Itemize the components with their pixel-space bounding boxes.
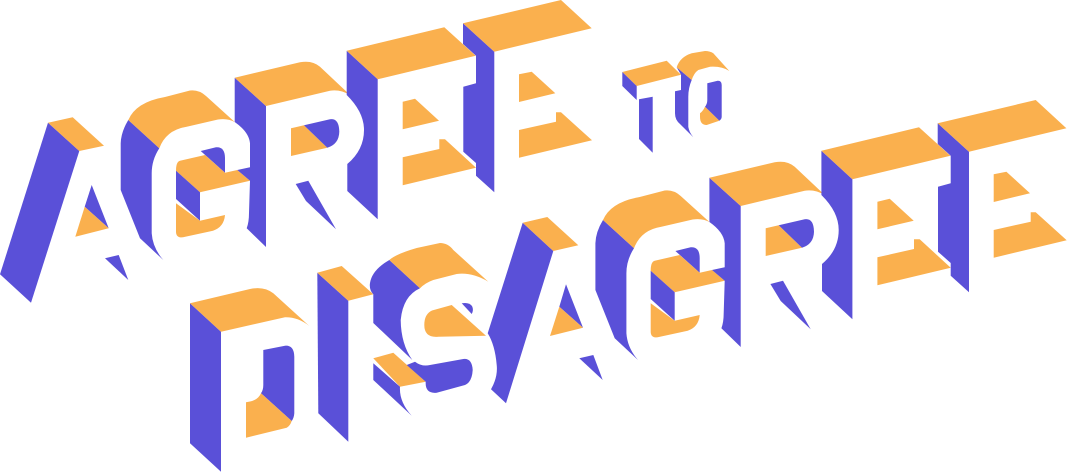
- letter A walls: [488, 217, 603, 403]
- word extrusion: TO: [622, 51, 729, 153]
- white letter faces: title text: TO: [637, 40, 742, 179]
- letter D walls: [190, 288, 309, 472]
- letter T walls: [622, 61, 681, 153]
- letters G R E E walls: [595, 100, 1067, 360]
- letter G walls: [595, 190, 725, 360]
- letter S walls: [370, 243, 488, 416]
- letter G walls: [121, 90, 250, 260]
- word extrusion: DISAGREE: [190, 100, 1067, 472]
- letter R walls: [235, 62, 350, 247]
- letter E walls, last: [463, 0, 592, 158]
- letter O walls: [675, 51, 729, 137]
- letter E walls: [347, 23, 494, 219]
- letter A walls: [0, 117, 128, 303]
- letter I walls: [317, 266, 373, 442]
- letter E walls, last: [938, 100, 1067, 258]
- letter R walls: [709, 162, 825, 347]
- letter E walls: [821, 123, 969, 319]
- white letter faces: title text: DISAGREE: [211, 72, 1057, 471]
- word extrusion: AGREE: [0, 0, 592, 303]
